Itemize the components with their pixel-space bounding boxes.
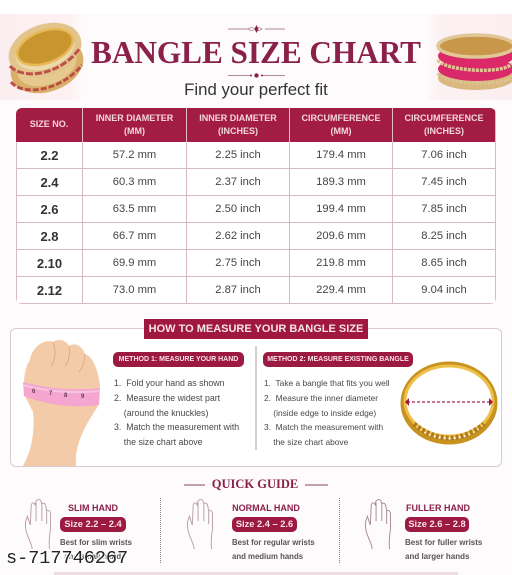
method 2 steps: 1. Take a bangle that fits you well <box>264 378 390 388</box>
method 2 steps: the size chart above <box>273 437 348 447</box>
size chart table: 73.0 mm <box>113 284 156 296</box>
size chart table: 7.85 inch <box>421 203 467 215</box>
icon: hand outline <box>186 499 213 550</box>
heading: how to measure: HOW TO MEASURE YOUR BANGLE SIZE <box>149 323 363 335</box>
size chart table: (INCHES) <box>218 126 258 136</box>
size chart table: INNER DIAMETER <box>96 112 173 122</box>
method 1 label: METHOD 1: MEASURE YOUR HAND <box>119 356 238 363</box>
method 1 <box>113 352 244 447</box>
method 1 steps <box>114 378 239 447</box>
quick guide text: QUICK GUIDE <box>212 477 298 491</box>
left pink header background <box>0 14 81 100</box>
size chart table: 2.87 inch <box>215 284 261 296</box>
icon: hand with measuring tape <box>22 340 100 466</box>
size chart table: 199.4 mm <box>316 203 366 215</box>
size pill <box>232 517 297 532</box>
watermark code: s-717746267 <box>6 548 128 569</box>
subtitle: Find your perfect fit <box>184 80 328 99</box>
size chart table: 179.4 mm <box>316 149 366 161</box>
guide divider <box>160 498 161 563</box>
method 2 label <box>263 352 413 367</box>
ornament right <box>305 484 328 486</box>
size chart table: (MM) <box>330 126 352 136</box>
icon: hand with measuring tape: 6 <box>32 389 36 395</box>
description: and small hands <box>64 552 125 560</box>
method 1 steps: 2. Measure the widest part <box>114 393 220 403</box>
size chart table: 69.9 mm <box>113 257 156 269</box>
description <box>405 538 482 560</box>
guide divider <box>339 498 340 563</box>
size chart table: 2.75 inch <box>215 257 261 269</box>
size chart table: 2.10 <box>37 256 62 270</box>
description <box>60 538 132 560</box>
icon: pink and gold bangles <box>436 33 512 90</box>
guide: fuller hand <box>364 499 482 560</box>
icon: hand outline <box>24 499 51 550</box>
ornament below title <box>228 73 285 78</box>
description: Best for fuller wrists <box>405 538 482 547</box>
top white band <box>0 0 512 14</box>
icon: hand with measuring tape: 7 <box>49 391 53 397</box>
size pill: Size 2.4 – 2.6 <box>236 519 293 529</box>
size chart table: 66.7 mm <box>113 230 156 242</box>
icon: hand with measuring tape: 9 <box>81 394 85 400</box>
method 1 steps: 1. Fold your hand as shown <box>114 378 225 388</box>
name: SLIM HAND <box>68 503 118 513</box>
divider <box>255 346 256 450</box>
method 2 steps <box>264 378 390 447</box>
size chart table: 2.25 inch <box>215 149 261 161</box>
size chart table: 229.4 mm <box>316 284 366 296</box>
method 1 steps: 3. Match the measurement with <box>114 422 239 432</box>
method 2 steps: 3. Match the measurement with <box>264 422 383 432</box>
size chart table: 2.62 inch <box>215 230 261 242</box>
size chart table: 2.2 <box>40 148 59 162</box>
ornament left <box>184 484 205 486</box>
bottom pink strip <box>54 572 458 575</box>
size chart table: 57.2 mm <box>113 149 156 161</box>
size pill <box>405 517 469 532</box>
icon: gold bangle with diameter line <box>400 362 498 444</box>
size chart table: 7.45 inch <box>421 176 467 188</box>
method 1 steps: the size chart above <box>124 437 203 447</box>
method 2 steps: 2. Measure the inner diameter <box>264 393 378 403</box>
method 1 label <box>113 352 244 367</box>
size chart table: (MM) <box>124 126 145 136</box>
guide: slim hand <box>24 499 132 560</box>
size chart table: 63.5 mm <box>113 203 156 215</box>
icon: hand outline <box>364 499 391 550</box>
size chart table: CIRCUMFERENCE <box>301 112 380 122</box>
size chart table: 7.06 inch <box>421 149 467 161</box>
method 2 steps: (inside edge to inside edge) <box>273 408 376 418</box>
size chart table: INNER DIAMETER <box>199 112 277 122</box>
size chart table: SIZE NO. <box>30 119 68 129</box>
icon: gold and red bangles <box>8 22 84 94</box>
size chart table: 60.3 mm <box>113 176 156 188</box>
title: BANGLE SIZE CHART <box>91 35 421 70</box>
description <box>232 538 315 560</box>
size chart table: 2.8 <box>40 228 59 244</box>
size chart table: 8.65 inch <box>421 257 467 269</box>
name: FULLER HAND <box>406 503 470 513</box>
size chart table: 2.50 inch <box>215 203 261 215</box>
size chart table: 219.8 mm <box>316 257 366 269</box>
description: and larger hands <box>405 552 469 560</box>
description: Best for slim wrists <box>60 538 132 547</box>
method 1 steps: (around the knuckles) <box>124 408 208 418</box>
size chart table: 189.3 mm <box>316 176 366 188</box>
size pill <box>60 517 126 532</box>
size pill: Size 2.2 – 2.4 <box>64 519 122 529</box>
size chart table: 8.25 inch <box>421 230 467 242</box>
size chart table: 2.12 <box>37 282 62 298</box>
size pill: Size 2.6 – 2.8 <box>408 519 466 529</box>
heading: how to measure <box>144 319 368 339</box>
ornament above title <box>228 25 285 33</box>
name: NORMAL HAND <box>232 503 300 513</box>
size chart table: CIRCUMFERENCE <box>404 112 484 122</box>
guide: normal hand <box>186 499 315 560</box>
size chart table: (INCHES) <box>424 126 464 136</box>
size chart table: 2.4 <box>40 174 59 190</box>
description: and medium hands <box>232 552 303 560</box>
size chart table: 2.37 inch <box>215 176 261 188</box>
method 2 label: METHOD 2: MEASURE EXISTING BANGLE <box>267 356 409 363</box>
icon: hand with measuring tape: 8 <box>64 393 68 399</box>
size chart table: 209.6 mm <box>316 230 366 242</box>
size chart table <box>16 108 496 304</box>
right pink header background <box>428 14 512 100</box>
method 2 <box>263 352 413 447</box>
size chart table: 2.6 <box>40 202 59 216</box>
size chart table: 9.04 inch <box>421 284 467 296</box>
panel: how to measure <box>10 328 502 467</box>
description: Best for regular wrists <box>232 538 315 547</box>
